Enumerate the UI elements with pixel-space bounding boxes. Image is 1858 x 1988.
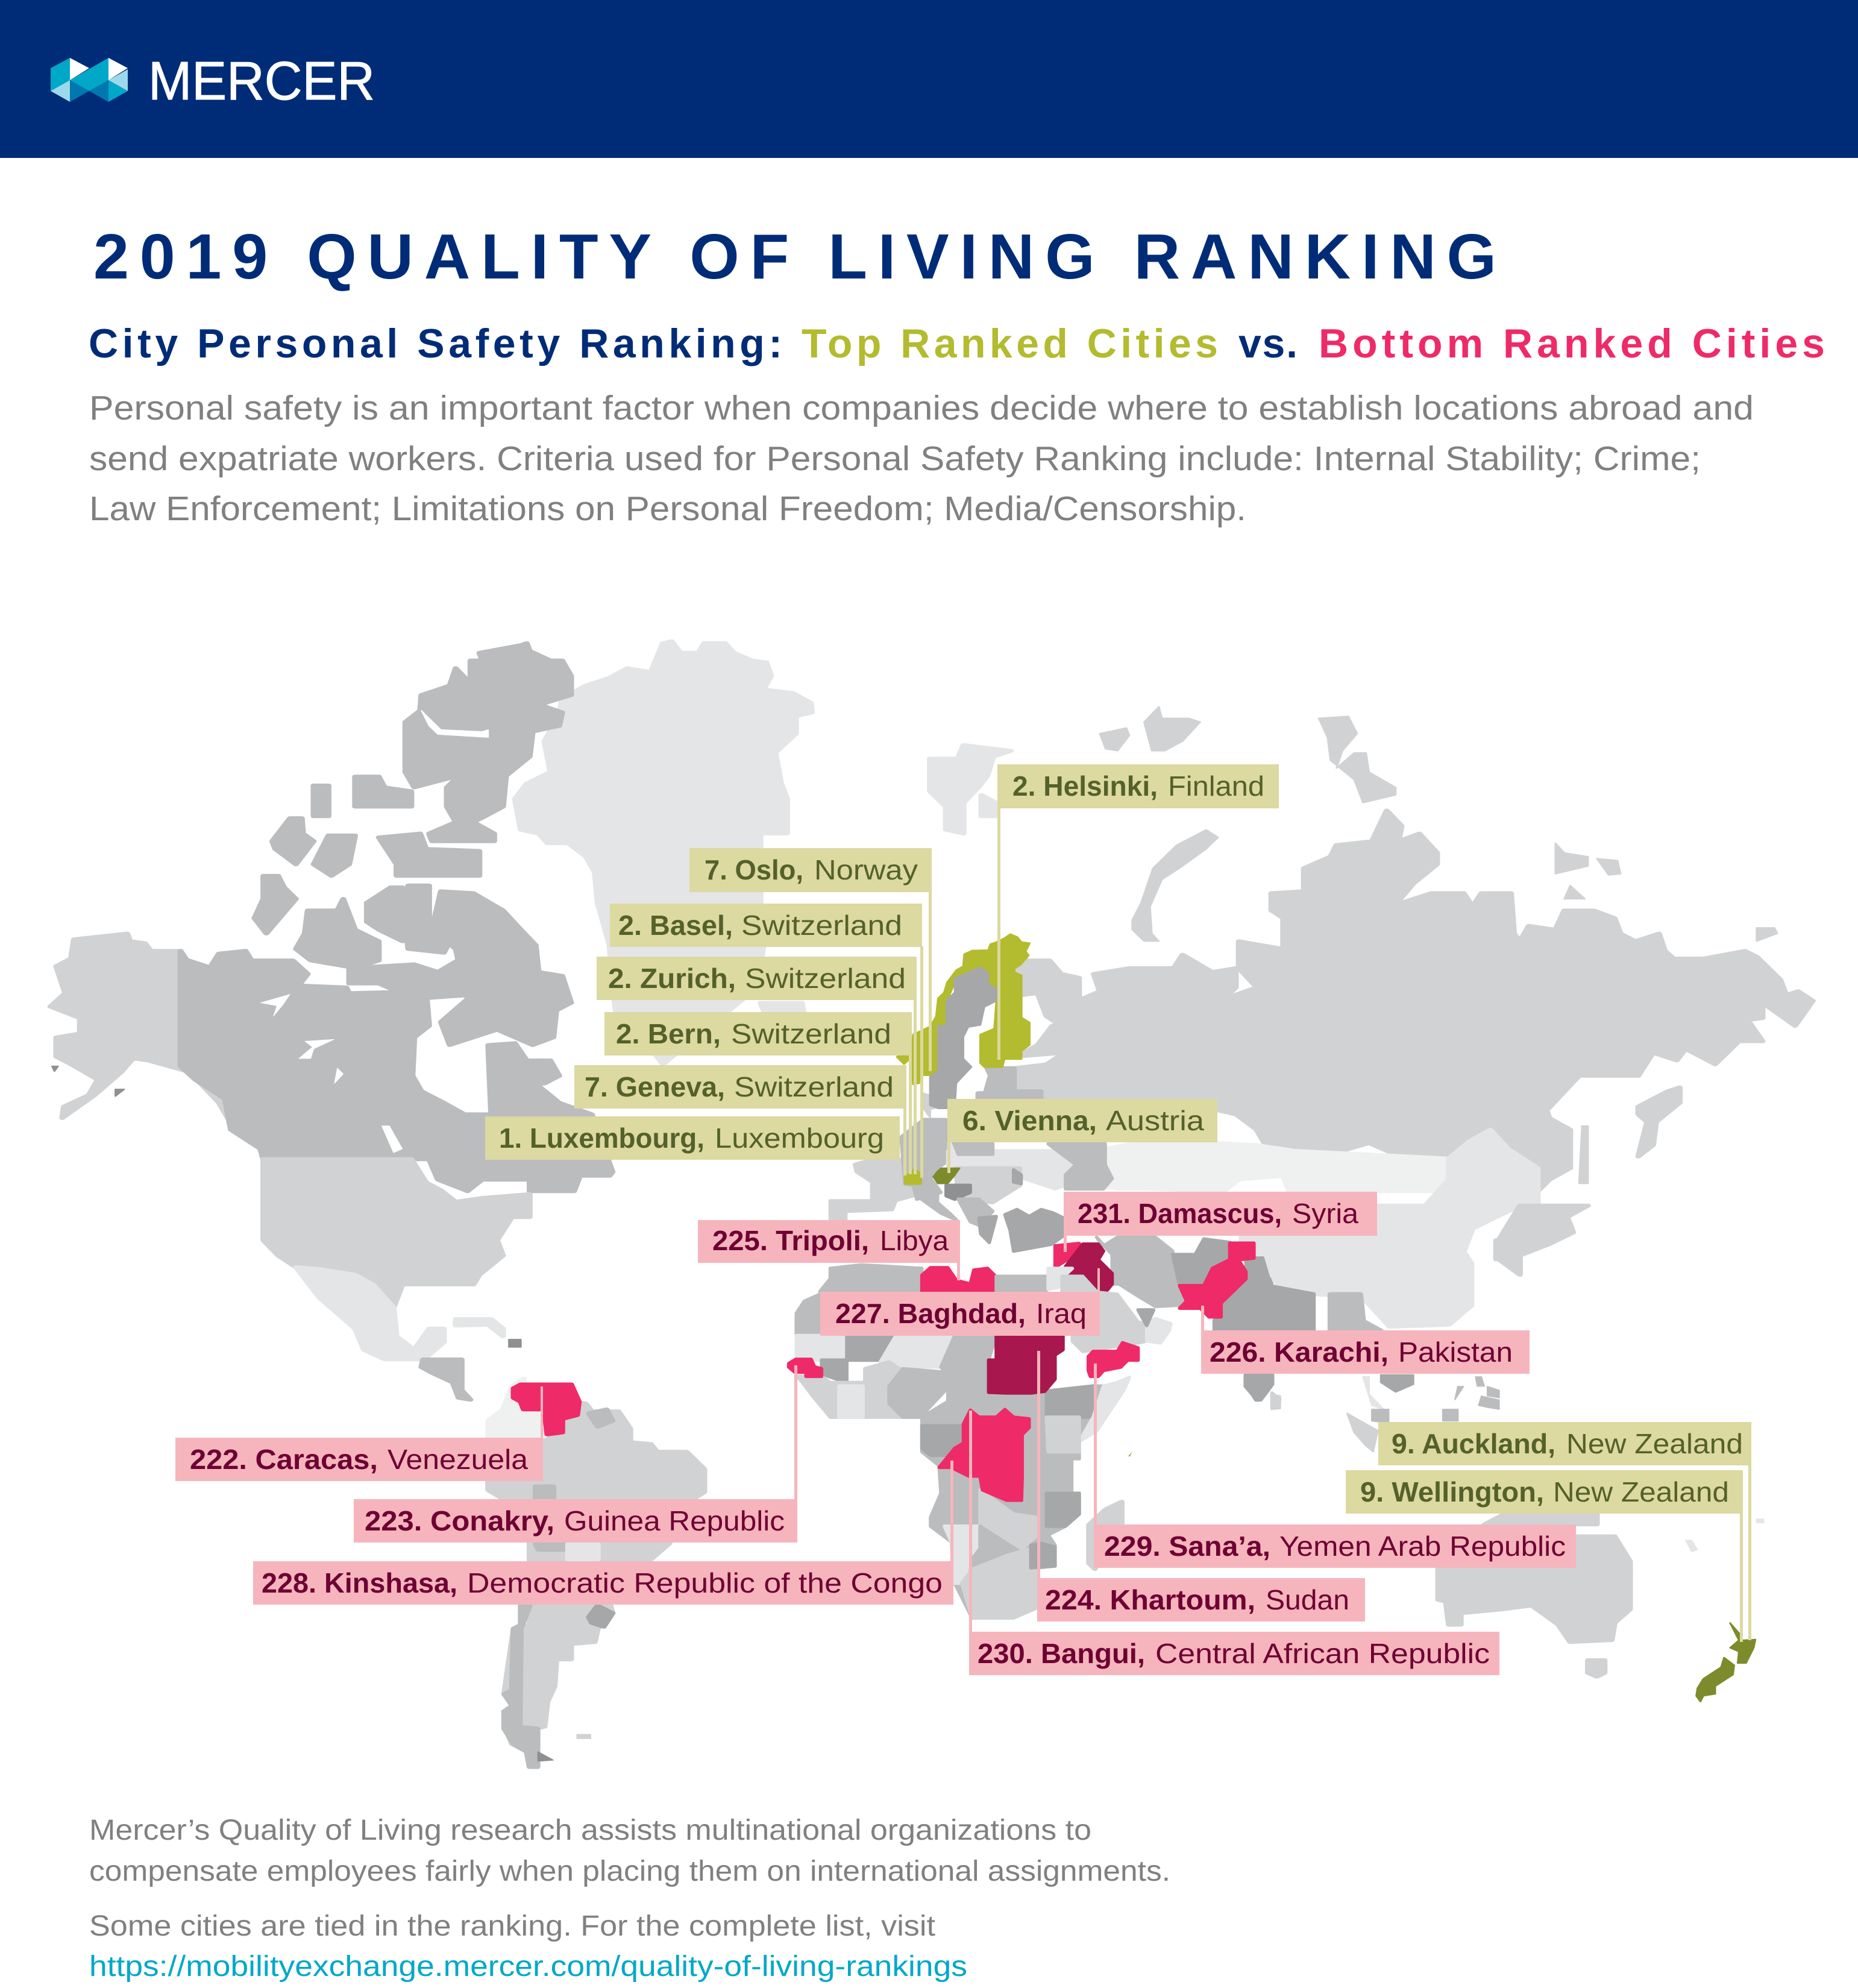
label: 2. Helsinki: 2. Helsinki, (1012, 770, 1158, 802)
footer text block: compensate employees fairly when placing them on international assignments. (89, 1855, 1170, 1887)
label: 228. Kinshasa: 228. Kinshasa, (262, 1567, 457, 1599)
label: 2. Basel: 2. Basel, (618, 910, 733, 941)
highlight: Switzerland and Luxembourg (905, 1169, 921, 1184)
label: 225. Tripoli: Libya (880, 1225, 949, 1256)
footer text block (89, 1814, 1170, 1983)
highlight: Iraq (1066, 1244, 1112, 1292)
map: Europe, Middle East and Africa (789, 1119, 1314, 1618)
intro text block: send expatriate workers. Criteria used for Personal Safety Ranking include: Internal Stability; Crime; (89, 439, 1701, 478)
label: 7. Oslo: 7. Oslo, (705, 854, 803, 885)
subtitle: Top Ranked Cities (802, 321, 1218, 366)
label: 222. Caracas (175, 1386, 543, 1481)
label: 230. Bangui: Central African Republic (1155, 1638, 1490, 1669)
label: 6. Vienna: Austria (1106, 1105, 1204, 1136)
leader lines and labels: top ranked cities (485, 764, 1751, 1642)
world map (50, 641, 1813, 1767)
label: 223. Conakry: Guinea Republic (564, 1505, 785, 1537)
label: 7. Oslo (689, 848, 932, 1071)
label: 6. Vienna: 6. Vienna, (962, 1105, 1097, 1136)
label: 2. Zurich: 2. Zurich, (608, 963, 736, 994)
intro text block: Law Enforcement; Limitations on Personal Freedom; Media/Censorship. (89, 489, 1246, 528)
label: 9. Auckland: 9. Auckland, (1392, 1428, 1555, 1459)
label: 224. Khartoum: 224. Khartoum, (1045, 1584, 1255, 1615)
icon: Mercer logo (51, 58, 128, 102)
header band (0, 0, 1858, 158)
label: 229. Sana'a: Yemen Arab Republic (1279, 1530, 1566, 1562)
label: 9. Auckland (1378, 1422, 1751, 1640)
label: 2. Helsinki (997, 764, 1279, 1060)
label: 230. Bangui: 230. Bangui, (978, 1638, 1145, 1669)
highlight: Pakistan (1179, 1243, 1254, 1317)
label: 227. Baghdad: Iraq (1036, 1298, 1087, 1329)
map: USA, Mexico, Central and South America (263, 1159, 705, 1767)
label: 7. Oslo: Norway (814, 854, 918, 885)
subtitle: City Personal Safety Ranking: (89, 321, 782, 366)
label: 6. Vienna (947, 1099, 1217, 1173)
label: 230. Bangui (969, 1411, 1499, 1675)
label: 1. Luxembourg: Luxembourg (715, 1122, 884, 1154)
highlight: Guinea (789, 1359, 821, 1376)
intro text block: Personal safety is an important factor when companies decide where to establish locations abroad and (89, 389, 1754, 427)
highlight: Yemen (1088, 1343, 1138, 1376)
label: 229. Sana'a: 229. Sana’a, (1104, 1530, 1270, 1562)
label: 223. Conakry: 223. Conakry, (365, 1505, 554, 1537)
label: 224. Khartoum: Sudan (1266, 1584, 1349, 1615)
footer text block: Mercer’s Quality of Living research assists multinational organizations to (89, 1814, 1091, 1846)
map: Scandinavia and northern Europe (897, 934, 1029, 1184)
label: 1. Luxembourg (485, 1116, 900, 1160)
label: 9. Wellington: New Zealand (1553, 1476, 1729, 1508)
Sweden (930, 967, 996, 1108)
highlight: Sudan (988, 1336, 1063, 1393)
label: 231. Damascus (1064, 1192, 1377, 1252)
map: Asia, Australia and Oceania (1089, 1206, 1764, 1702)
label: 224. Khartoum (1037, 1351, 1365, 1622)
label: 227. Baghdad (820, 1268, 1100, 1336)
label: 222. Caracas: 222. Caracas, (190, 1444, 378, 1475)
footer text block: https://mobilityexchange.mercer.com/quality-of-living-rankings (89, 1951, 967, 1983)
label: 9. Wellington: 9. Wellington, (1360, 1476, 1544, 1508)
highlight: Venezuela (513, 1385, 579, 1435)
title: 2019 QUALITY OF LIVING RANKING (93, 221, 1496, 292)
label: 2. Basel (610, 904, 923, 1178)
label: 1. Luxembourg: 1. Luxembourg, (499, 1122, 705, 1154)
highlight: Democratic Republic of the Congo (939, 1409, 1029, 1500)
label: 2. Bern: Switzerland (731, 1018, 891, 1049)
subtitle: vs. (1238, 321, 1298, 366)
label: 2. Zurich (597, 957, 917, 1174)
subtitle: Bottom Ranked Cities (1319, 321, 1825, 366)
label: 227. Baghdad: 227. Baghdad, (835, 1298, 1026, 1329)
label: 225. Tripoli: 225. Tripoli, (712, 1225, 869, 1256)
footer text block: Some cities are tied in the ranking. For the complete list, visit (89, 1910, 935, 1942)
label: 7. Geneva (574, 1065, 906, 1175)
label: 2. Basel: Switzerland (741, 910, 902, 941)
map: Russia and northern Asia (930, 706, 1813, 1206)
label: 7. Geneva: Switzerland (734, 1071, 894, 1103)
label: 229. Sana'a (1094, 1364, 1576, 1568)
highlight: New Zealand (1696, 1623, 1756, 1702)
label: 9. Auckland: New Zealand (1566, 1428, 1743, 1459)
label: 2. Helsinki: Finland (1168, 770, 1264, 802)
label: 231. Damascus: Syria (1292, 1198, 1358, 1229)
label: 228. Kinshasa (253, 1461, 953, 1605)
label: 7. Geneva: 7. Geneva, (585, 1071, 725, 1103)
intro text block (89, 389, 1754, 528)
label: 2. Bern: 2. Bern, (616, 1018, 721, 1049)
label: 9. Wellington (1346, 1470, 1743, 1642)
logo wordmark: MERCER (148, 51, 375, 112)
label: 2. Zurich: Switzerland (745, 963, 906, 994)
subtitle (89, 321, 1825, 366)
map: North America and Greenland (50, 641, 812, 1191)
label: 222. Caracas: Venezuela (388, 1444, 528, 1475)
label: 225. Tripoli (698, 1220, 960, 1280)
label: 226. Karachi: 226. Karachi, (1210, 1336, 1389, 1368)
label: 226. Karachi: Pakistan (1398, 1336, 1513, 1368)
label: 228. Kinshasa: Democratic Republic of the Congo (467, 1567, 943, 1599)
highlight: Syria (1055, 1244, 1079, 1267)
label: 223. Conakry (354, 1365, 797, 1543)
leader lines and labels: bottom ranked cities (175, 1192, 1576, 1675)
label: 226. Karachi (1201, 1306, 1530, 1374)
label: 2. Bern (604, 1012, 912, 1174)
label: 231. Damascus: 231. Damascus, (1078, 1198, 1282, 1229)
highlight: Norway and Finland (897, 934, 1029, 1084)
